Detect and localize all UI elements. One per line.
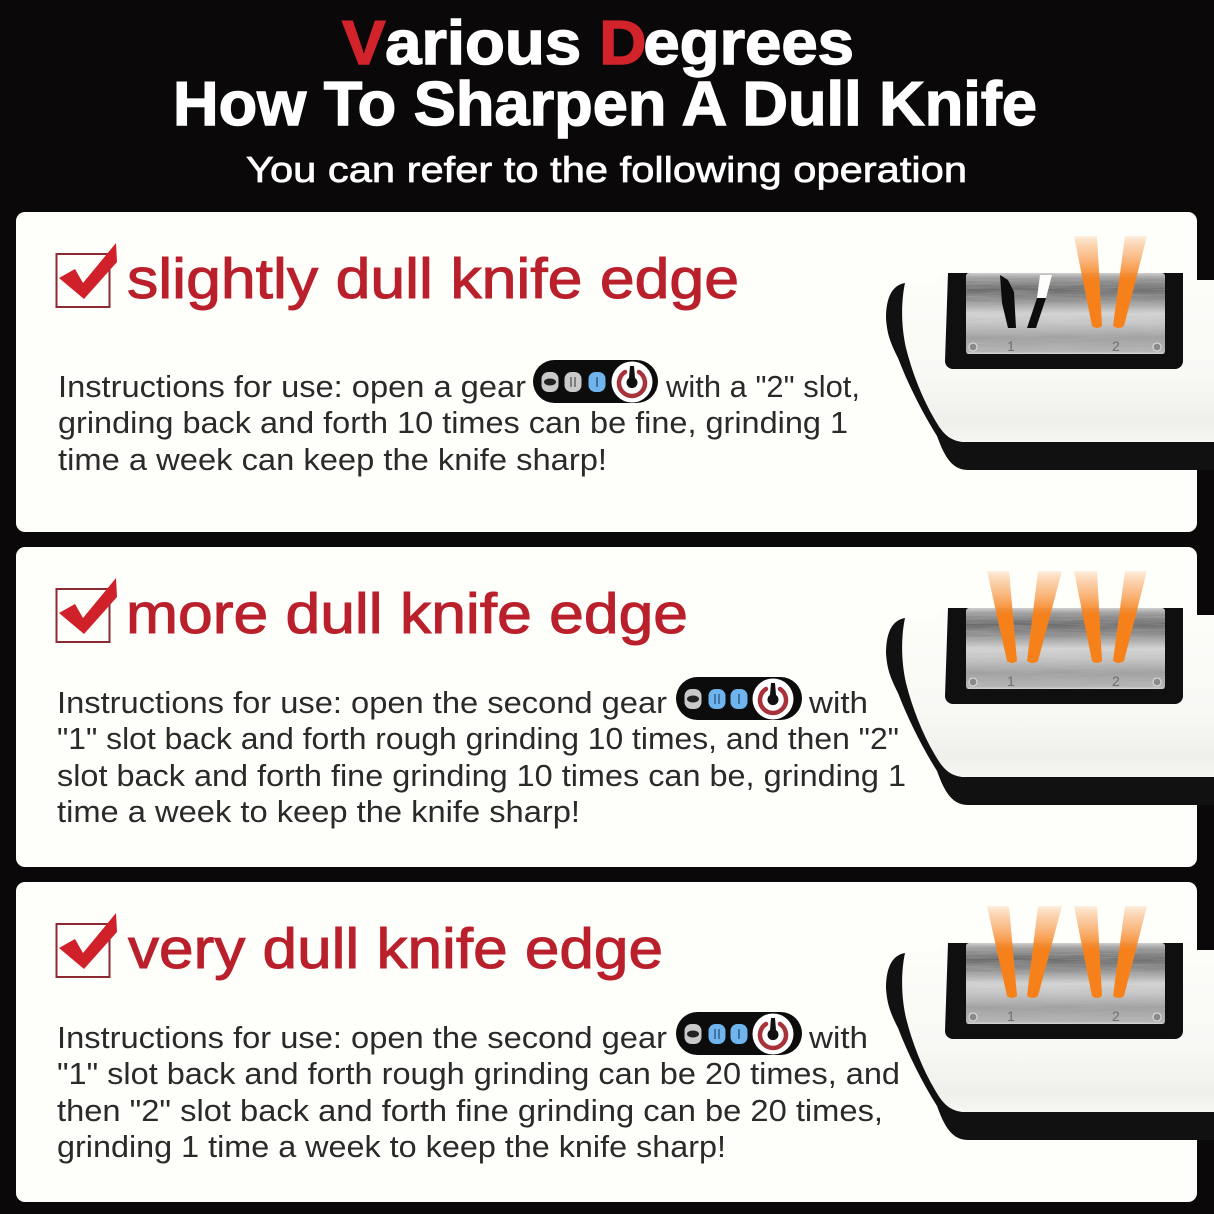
instructions text: grinding 1 time a week to keep the knife sharp! (57, 1130, 726, 1164)
title line 2: How To Sharpen A Dull Knife (173, 70, 1037, 139)
sharpener black base (886, 283, 1214, 470)
slot 1 white highlight (1037, 275, 1052, 298)
icon: red check mark in box (56, 578, 117, 642)
icon: gear switch set to first gear (533, 360, 658, 403)
instructions text: time a week can keep the knife sharp! (58, 443, 607, 477)
title line 1: Various Degrees (342, 9, 854, 78)
instructions text: Instructions for use: open the second gear (57, 686, 667, 720)
heading: slightly dull knife edge (127, 247, 739, 311)
screws and slot numbers (969, 673, 1161, 689)
sharpener white body (902, 607, 1214, 777)
screws and slot numbers (969, 338, 1161, 354)
sharpener white body (902, 942, 1214, 1112)
steel plate (966, 943, 1165, 1024)
header (173, 9, 1037, 190)
panel background (16, 882, 1197, 1202)
instructions text: with a "2" slot, (665, 370, 860, 404)
instructions text: "1" slot back and forth rough grinding 10 times, and then "2" (57, 722, 899, 756)
instructions text: Instructions for use: open a gear (58, 370, 526, 404)
instructions text: then "2" slot back and forth fine grinding can be 20 times, (57, 1094, 883, 1128)
heading: more dull knife edge (126, 582, 688, 646)
icon: gear switch set to second gear (676, 677, 802, 720)
instructions text (57, 1021, 900, 1164)
instructions text: with (808, 1021, 868, 1055)
panel: more dull knife edge (16, 547, 1214, 867)
slot 1 black cut-outs (1000, 275, 1046, 328)
screws and slot numbers: 1 (1007, 1008, 1015, 1024)
sharpener illustration (886, 906, 1214, 1140)
orange blade guides for slots 1 and 2 (987, 571, 1147, 663)
instructions text: with (808, 686, 868, 720)
sharpener slot housing (945, 608, 1183, 704)
screws and slot numbers: 2 (1112, 673, 1120, 689)
panel: very dull knife edge (16, 882, 1214, 1202)
sharpener slot housing (945, 273, 1183, 369)
orange blade guides for slot 2 (1074, 236, 1147, 328)
orange blade guides for slots 1 and 2 (987, 906, 1147, 998)
steel plate (966, 273, 1165, 354)
icon: red check mark in box (56, 243, 117, 307)
instructions text: Instructions for use: open the second gear (57, 1021, 667, 1055)
sharpener black base (886, 953, 1214, 1140)
sharpener white body (902, 272, 1214, 442)
panel: slightly dull knife edge (16, 212, 1214, 532)
sharpener slot housing (945, 943, 1183, 1039)
panel background (16, 212, 1197, 532)
heading: very dull knife edge (128, 917, 663, 981)
sharpener illustration (886, 236, 1214, 470)
sharpener illustration (886, 571, 1214, 805)
screws and slot numbers (969, 1008, 1161, 1024)
panel background (16, 547, 1197, 867)
screws and slot numbers: 1 (1007, 338, 1015, 354)
instructions text: "1" slot back and forth rough grinding can be 20 times, and (57, 1057, 900, 1091)
screws and slot numbers: 2 (1112, 338, 1120, 354)
screws and slot numbers: 2 (1112, 1008, 1120, 1024)
instructions text: time a week to keep the knife sharp! (57, 795, 580, 829)
icon: red check mark in box (56, 913, 117, 977)
screws and slot numbers: 1 (1007, 673, 1015, 689)
instructions text (57, 686, 906, 829)
instructions text: slot back and forth fine grinding 10 times can be, grinding 1 (57, 759, 906, 793)
instructions text: grinding back and forth 10 times can be fine, grinding 1 (58, 406, 848, 440)
sharpener black base (886, 618, 1214, 805)
icon: gear switch set to second gear (676, 1012, 802, 1055)
subtitle: You can refer to the following operation (246, 149, 967, 190)
steel plate (966, 608, 1165, 689)
instructions text (58, 370, 860, 477)
